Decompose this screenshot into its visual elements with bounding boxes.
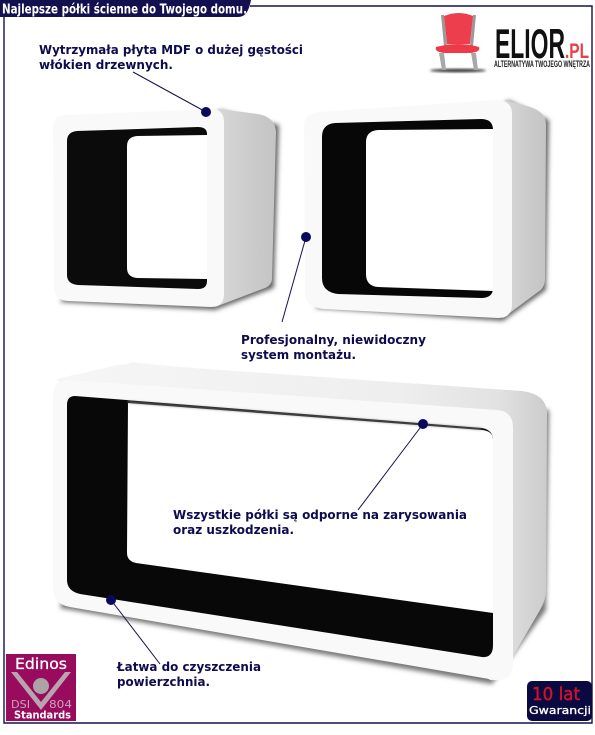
callout: mounting system: system montażu. (241, 347, 356, 362)
callout: easy cleaning: powierzchnia. (117, 674, 210, 689)
badge: Edinos Standards: Standards (14, 708, 71, 722)
callout: scratch resistance: Wszystkie półki są odporne na zarysowania (173, 507, 467, 522)
callout: easy cleaning: Łatwa do czyszczenia (116, 659, 261, 674)
callout: scratch resistance: oraz uszkodzenia. (173, 522, 294, 537)
badge: Edinos Standards: Edinos (15, 655, 67, 673)
badge: Edinos Standards: DSI (11, 698, 30, 711)
small cube shelf (53, 109, 279, 310)
callout: easy cleaning (106, 595, 261, 689)
icon: red chair (430, 13, 486, 72)
callout: MDF board: Wytrzymała płyta MDF o dużej gęstości (39, 42, 303, 57)
callout: MDF board: włókien drzewnych. (39, 57, 173, 72)
callout: MDF board (39, 42, 303, 117)
header tab: Najlepsze półki ścienne do Twojego domu. (2, 2, 247, 18)
badge: 10 year warranty: 10 lat (532, 684, 580, 705)
medium cube shelf (304, 100, 549, 321)
logo: Elior (430, 13, 590, 72)
badge: Edinos Standards (6, 654, 76, 722)
badge: Edinos Standards: 804 (49, 698, 72, 711)
callout: mounting system: Profesjonalny, niewidoczny (241, 332, 426, 347)
badge: 10 year warranty (527, 681, 592, 721)
badge: 10 year warranty: Gwarancji (529, 704, 591, 717)
callout: scratch resistance (173, 419, 467, 537)
callout: mounting system (241, 232, 426, 362)
large rectangular shelf (53, 364, 549, 684)
